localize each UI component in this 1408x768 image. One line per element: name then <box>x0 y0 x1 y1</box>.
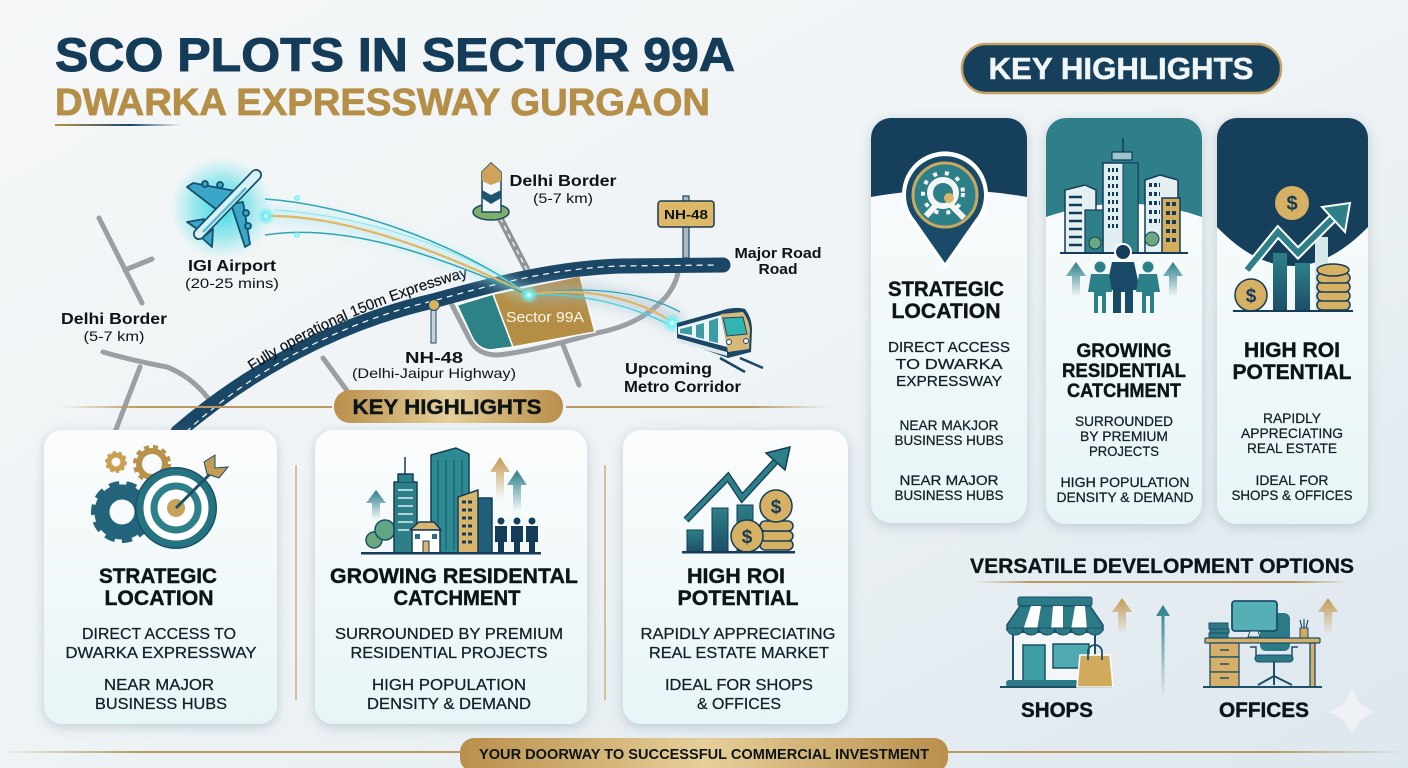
arrow: gold up by office <box>1318 598 1338 634</box>
text block <box>1232 410 1352 503</box>
heading <box>888 278 1004 323</box>
heading: CATCHMENT <box>394 587 521 610</box>
IGI airport label <box>185 258 279 291</box>
heading: HIGH ROI <box>1244 339 1340 362</box>
text block: DWARKA EXPRESSWAY <box>66 645 257 662</box>
heading: HIGH ROI <box>687 565 785 588</box>
dividers <box>295 465 606 700</box>
text block: EXPRESSWAY <box>896 373 1002 390</box>
text block: HIGH POPULATION <box>1060 474 1190 490</box>
NH-48 pin <box>428 300 440 343</box>
text block: APPRECIATING <box>1241 425 1343 441</box>
icon: growth chart and coins: $ <box>771 497 782 518</box>
text block: DENSITY & DEMAND <box>1056 489 1194 505</box>
icon: office desk <box>1203 601 1322 688</box>
text block: BY PREMIUM <box>1080 428 1168 444</box>
text block <box>888 339 1010 503</box>
upcoming metro label: Upcoming <box>625 361 712 378</box>
NH-48 label: NH-48 <box>405 350 463 367</box>
heading: POTENTIAL <box>1232 361 1352 384</box>
key highlights band: KEY HIGHLIGHTS <box>352 396 542 419</box>
Delhi border left label: Delhi Border <box>61 311 167 328</box>
IGI airport label: (20-25 mins) <box>185 275 279 291</box>
text block: NEAR MAKJOR <box>900 417 998 433</box>
icon: growth chart and coins: $ <box>742 527 753 548</box>
heading: GROWING RESIDENTAL <box>330 565 578 588</box>
text block <box>66 626 257 713</box>
text block: DIRECT ACCESS <box>888 339 1010 356</box>
panel: high roi potential <box>623 430 848 724</box>
heading: GROWING <box>1076 341 1172 362</box>
Delhi border left label: (5-7 km) <box>84 328 144 344</box>
heading <box>330 565 578 610</box>
panel: growing residential catchment <box>315 430 587 724</box>
text block: PROJECTS <box>1089 443 1159 459</box>
heading <box>99 565 217 610</box>
text block: SURROUNDED <box>1075 413 1173 429</box>
text block: SHOPS & OFFICES <box>1232 487 1352 503</box>
heading: STRATEGIC <box>99 565 217 588</box>
text block: RESIDENTIAL PROJECTS <box>350 645 548 662</box>
panel: strategic location <box>44 430 277 724</box>
location map <box>61 159 822 430</box>
icon: airplane <box>170 156 274 260</box>
heading: LOCATION <box>892 300 1000 323</box>
icon: rising chart and coins <box>1233 186 1353 312</box>
upcoming metro label <box>624 361 741 396</box>
icon: rising chart and coins: $ <box>1286 193 1298 215</box>
heading <box>678 565 799 610</box>
title: DWARKA EXPRESSWAY GURGAON <box>55 82 710 124</box>
text block: BUSINESS HUBS <box>894 487 1004 503</box>
NH-48 road sign: NH-48 <box>664 207 708 222</box>
NH-48 road sign <box>658 196 714 258</box>
Sector 99A plot: Sector 99A <box>506 309 584 326</box>
right heading pill <box>962 44 1281 93</box>
heading: LOCATION <box>104 587 214 610</box>
text block: IDEAL FOR <box>1256 472 1328 488</box>
site to metro light trails <box>520 286 682 333</box>
NH-48 label <box>352 350 516 381</box>
Delhi border top label: Delhi Border <box>510 173 616 190</box>
road to Delhi border <box>500 218 527 270</box>
Major road label: Major Road <box>734 245 822 262</box>
label: offices: OFFICES <box>1219 699 1309 722</box>
Delhi border left label <box>61 311 167 344</box>
icon: buildings, people and arrows <box>361 448 541 554</box>
expressway label: Fully operational 150m Expressway <box>247 270 466 370</box>
icon: growth chart and coins <box>682 447 795 554</box>
text block: RAPIDLY <box>1263 410 1322 426</box>
panel: right high roi <box>1217 118 1368 524</box>
footer banner: YOUR DOORWAY TO SUCCESSFUL COMMERCIAL INVESTMENT <box>479 746 929 763</box>
panel: right growing catchment <box>1046 118 1202 524</box>
text block <box>335 626 563 713</box>
text block: SURROUNDED BY PREMIUM <box>335 626 563 643</box>
text block: DIRECT ACCESS TO <box>82 626 236 643</box>
icon: shop <box>1000 597 1113 688</box>
heading: CATCHMENT <box>1067 381 1181 402</box>
arrow: gold up by shop <box>1112 598 1132 634</box>
title: SCO PLOTS IN SECTOR 99A <box>55 28 735 81</box>
right heading pill: KEY HIGHLIGHTS <box>988 51 1254 86</box>
key highlights band <box>60 390 830 423</box>
label: shops: SHOPS <box>1021 699 1093 722</box>
Major road label: Road <box>758 261 798 278</box>
title <box>55 28 735 126</box>
expressway road <box>178 265 723 432</box>
heading <box>1232 339 1352 384</box>
heading: RESIDENTIAL <box>1062 361 1186 382</box>
arrow: teal divider <box>1156 605 1170 698</box>
panel: right strategic location <box>871 118 1027 523</box>
text block: BUSINESS HUBS <box>95 696 227 713</box>
airport to site light trails <box>257 194 529 295</box>
Delhi border top label <box>510 173 616 206</box>
icon: metro train <box>677 308 763 372</box>
text block: BUSINESS HUBS <box>894 432 1004 448</box>
text block: NEAR MAJOR <box>104 677 214 694</box>
text block: NEAR MAJOR <box>900 472 998 488</box>
text block: TO DWARKA <box>896 356 1002 373</box>
icon: rising chart and coins: $ <box>1246 286 1257 307</box>
text block: & OFFICES <box>697 696 781 713</box>
heading <box>1062 341 1186 402</box>
icon: towers and people <box>1060 138 1188 313</box>
text block: RAPIDLY APPRECIATING <box>640 626 836 643</box>
text block <box>1056 413 1194 505</box>
IGI airport label: IGI Airport <box>188 258 276 275</box>
upcoming metro label: Metro Corridor <box>624 379 741 396</box>
heading: POTENTIAL <box>678 587 799 610</box>
icon: location pin <box>902 151 988 268</box>
text block: DENSITY & DEMAND <box>367 696 531 713</box>
text block: REAL ESTATE MARKET <box>649 645 829 662</box>
Sector 99A plot <box>457 276 595 350</box>
icon: gears and target <box>94 447 228 548</box>
text block <box>640 626 836 713</box>
text block: HIGH POPULATION <box>372 677 526 694</box>
Delhi border top label: (5-7 km) <box>533 190 593 206</box>
grey side roads <box>99 218 678 432</box>
heading: STRATEGIC <box>888 278 1004 301</box>
footer banner <box>0 738 1408 768</box>
text block: IDEAL FOR SHOPS <box>665 677 813 694</box>
text block: REAL ESTATE <box>1247 440 1337 456</box>
Delhi border marker <box>473 163 509 220</box>
Major road label <box>734 245 822 278</box>
NH-48 label: (Delhi-Jaipur Highway) <box>352 365 516 381</box>
decorative sparkle icon <box>1328 688 1376 736</box>
versatile development heading: VERSATILE DEVELOPMENT OPTIONS <box>970 555 1354 578</box>
